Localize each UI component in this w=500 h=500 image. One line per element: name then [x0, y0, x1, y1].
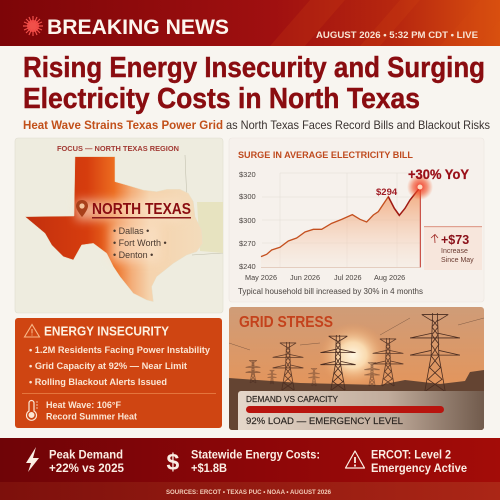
stat: peak demand: +22% vs 2025 — [49, 461, 124, 475]
stat: peak demand: Peak Demand — [49, 448, 123, 462]
stat: energy costs — [191, 448, 320, 475]
heat wave text: Heat Wave: 106°F — [46, 400, 121, 410]
sources line: SOURCES: ERCOT • TEXAS PUC • NOAA • AUGUST 2026 — [166, 490, 332, 496]
bullet list: • Rolling Blackout Alerts Issued — [29, 377, 167, 387]
heat wave text: Record Summer Heat — [46, 412, 137, 422]
peak glow marker — [407, 174, 433, 200]
icon: warning triangle — [24, 324, 40, 337]
panel: energy insecurity — [15, 318, 222, 428]
y axis labels: $240 — [239, 262, 256, 271]
label: North Texas: NORTH TEXAS — [92, 201, 191, 218]
stat: energy costs: Statewide Energy Costs: — [191, 448, 320, 462]
overlay: demand vs capacity: 92% LOAD — EMERGENCY LEVEL — [246, 416, 403, 426]
icon: thermometer — [26, 400, 38, 420]
chart caption: Typical household bill increased by 30% in 4 months — [238, 287, 423, 296]
overlay: demand vs capacity: DEMAND VS CAPACITY — [246, 395, 339, 404]
horizon treeline — [229, 370, 484, 430]
x axis labels: Aug 2026 — [374, 273, 405, 282]
x axis labels: Jun 2026 — [290, 273, 320, 282]
y axis labels: $300 — [239, 192, 256, 201]
city list — [113, 226, 167, 260]
city list: • Dallas • — [113, 226, 149, 236]
x axis labels: Jul 2026 — [334, 273, 362, 282]
callout: +$73 increase: +$73 — [441, 233, 469, 247]
subtitle — [23, 118, 490, 132]
callout: +30% YoY: +30% YoY — [408, 166, 470, 182]
heading: focus region: FOCUS — NORTH TEXAS REGION — [57, 144, 179, 153]
stat: ERCOT: ERCOT: Level 2 — [371, 448, 451, 462]
icon: lightning bolt — [26, 447, 39, 472]
grid lines — [262, 173, 420, 267]
label: $294: $294 — [376, 187, 398, 198]
stat: peak demand — [49, 448, 124, 475]
y axis labels: $320 — [239, 170, 256, 179]
heat wave text — [46, 400, 137, 422]
heading: energy insecurity: ENERGY INSECURITY — [44, 324, 170, 338]
y axis labels: $300 — [239, 216, 256, 225]
stat: ERCOT: Emergency Active — [371, 461, 467, 475]
header banner — [0, 0, 500, 46]
footer band — [0, 438, 500, 500]
stat: energy costs: +$1.8B — [191, 461, 227, 475]
highlight behind north texas label — [76, 200, 182, 262]
icon: warning triangle — [346, 451, 364, 468]
line chart — [261, 187, 420, 267]
stat: ERCOT — [371, 448, 467, 475]
heading: chart: SURGE IN AVERAGE ELECTRICITY BILL — [238, 150, 413, 160]
heading: grid stress: GRID STRESS — [239, 314, 333, 331]
title — [23, 52, 485, 115]
panel: electricity bill chart — [229, 138, 484, 302]
y axis labels: $270 — [239, 239, 256, 248]
x axis labels — [245, 273, 405, 282]
panel: Texas map — [15, 138, 223, 313]
bullet list — [29, 345, 211, 387]
y axis labels — [239, 170, 256, 271]
breaking news label: BREAKING NEWS — [47, 16, 229, 39]
bullet list: • Grid Capacity at 92% — Near Limit — [29, 361, 187, 371]
x axis labels: May 2026 — [245, 273, 277, 282]
callout: +$73 increase — [424, 226, 482, 270]
callout: +$73 increase: Since May — [441, 257, 474, 264]
title: Electricity Costs in North Texas — [23, 83, 420, 115]
overlay: demand vs capacity — [238, 391, 488, 433]
icon: dollar sign: $ — [166, 449, 180, 475]
date and time: AUGUST 2026 • 5:32 PM CDT • LIVE — [316, 30, 478, 41]
icon: breaking news burst — [23, 16, 43, 36]
panel: grid stress — [229, 307, 488, 433]
icon: location pin — [76, 200, 88, 217]
Texas shape — [25, 157, 203, 302]
callout: +$73 increase: Increase — [441, 248, 468, 255]
subtitle: Heat Wave Strains Texas Power Grid — [23, 118, 223, 132]
transmission towers — [229, 313, 484, 391]
city list: • Denton • — [113, 250, 153, 260]
bullet list: • 1.2M Residents Facing Power Instability — [29, 345, 211, 355]
city list: • Fort Worth • — [113, 238, 167, 248]
